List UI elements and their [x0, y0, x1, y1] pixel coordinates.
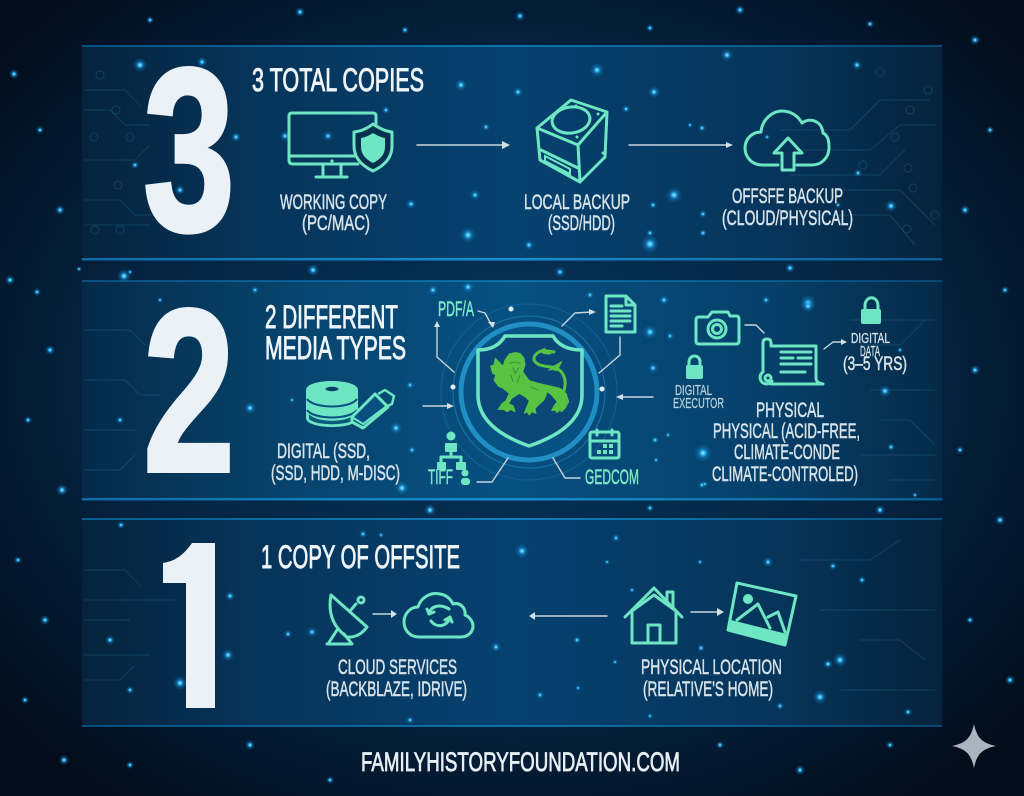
- label: digital executor: EXECUTOR: [673, 395, 724, 412]
- label: digital executor: [673, 382, 724, 412]
- icon: local backup drive: [537, 100, 607, 182]
- arrow: [629, 142, 733, 148]
- label: local backup: LOCAL BACKUP: [524, 191, 630, 214]
- icon: calendar: [590, 430, 619, 458]
- label: local backup: [524, 191, 630, 235]
- arrow: [691, 608, 724, 616]
- icon: disks and usb drive: [306, 381, 394, 428]
- arrow: [529, 612, 607, 620]
- label: physical location: (RELATIVE'S HOME): [643, 678, 773, 701]
- icon: document: [606, 296, 635, 332]
- label: digital data: [843, 330, 907, 375]
- heading: 3 total copies: 3 TOTAL COPIES: [252, 62, 424, 98]
- icon: lock: [686, 356, 703, 379]
- heading: 2 different media types: MEDIA TYPES: [265, 330, 406, 366]
- icon: camera: [696, 312, 739, 344]
- heading: 2 different media types: [265, 299, 406, 366]
- label: physical: CLIMATE-CONDE: [734, 441, 840, 464]
- icon: satellite dish: [327, 595, 367, 644]
- icon: cloud upload: [745, 111, 829, 170]
- numeral 3: 3: [143, 21, 235, 280]
- heading: 1 copy of offsite: 1 COPY OF OFFSITE: [261, 539, 460, 575]
- label: working copy: WORKING COPY: [280, 191, 387, 214]
- label: offsite backup: (CLOUD/PHYSICAL): [722, 207, 853, 230]
- panel: 1 copy offsite: [82, 518, 942, 727]
- label: digital executor: DIGITAL: [675, 382, 712, 399]
- icon: monitor with shield: [289, 113, 392, 177]
- label: working copy: [280, 191, 387, 235]
- label: offsite backup: OFFSFE BACKUP: [732, 185, 843, 208]
- footer url: FAMILYHISTORYFOUNDATION.COM: [361, 747, 680, 777]
- label: digital data: DATA: [860, 343, 880, 360]
- icon: sparkle: [952, 724, 996, 768]
- label: digital data: DIGITAL: [851, 330, 890, 347]
- icon: scroll: [760, 339, 823, 384]
- heading: 2 different media types: 2 DIFFERENT: [265, 299, 398, 335]
- label: digital: (SSD, HDD, M-DISC): [271, 462, 400, 485]
- arrow: [373, 610, 397, 618]
- numeral 2: 2: [143, 262, 235, 521]
- label: physical: CLIMATE-CONTROLED): [712, 463, 858, 486]
- label: cloud services: [326, 656, 467, 701]
- label: digital data: (3–5 YRS): [843, 354, 907, 375]
- icon: lock top: [861, 298, 881, 324]
- label: working copy: (PC/MAC): [302, 212, 370, 235]
- numeral 1: 1: [142, 499, 234, 758]
- label: local backup: (SSD/HDD): [548, 212, 615, 235]
- label: digital: [271, 440, 400, 485]
- central rings: [441, 304, 617, 480]
- label: gedcom: GEDCOM: [585, 466, 639, 489]
- icon: cloud sync: [404, 594, 473, 637]
- panel: 3 total copies: [82, 21, 942, 280]
- label: cloud services: CLOUD SERVICES: [338, 656, 457, 679]
- label: pdf/a: PDF/A: [438, 298, 474, 321]
- icon: org chart: [437, 432, 470, 485]
- icon: shield with lion: [478, 336, 582, 446]
- icon: house: [625, 588, 682, 643]
- numeral 1: [163, 543, 215, 708]
- label: physical: PHYSICAL (ACID-FREE,: [713, 420, 860, 443]
- label: physical location: [641, 656, 782, 701]
- label: physical: [712, 399, 860, 486]
- label: physical location: PHYSICAL LOCATION: [641, 656, 782, 679]
- icon: photo: [728, 583, 796, 645]
- label: cloud services: (BACKBLAZE, IDRIVE): [326, 678, 467, 701]
- label: physical: PHYSICAL: [756, 399, 824, 422]
- arrow: [417, 141, 510, 149]
- label: offsite backup: [722, 185, 853, 230]
- label: tiff: TIFF: [428, 466, 453, 489]
- connector lines: [423, 306, 847, 482]
- panel: 2 different media types: [82, 262, 942, 521]
- lion crest: [491, 347, 569, 415]
- label: digital: DIGITAL (SSD,: [277, 440, 370, 463]
